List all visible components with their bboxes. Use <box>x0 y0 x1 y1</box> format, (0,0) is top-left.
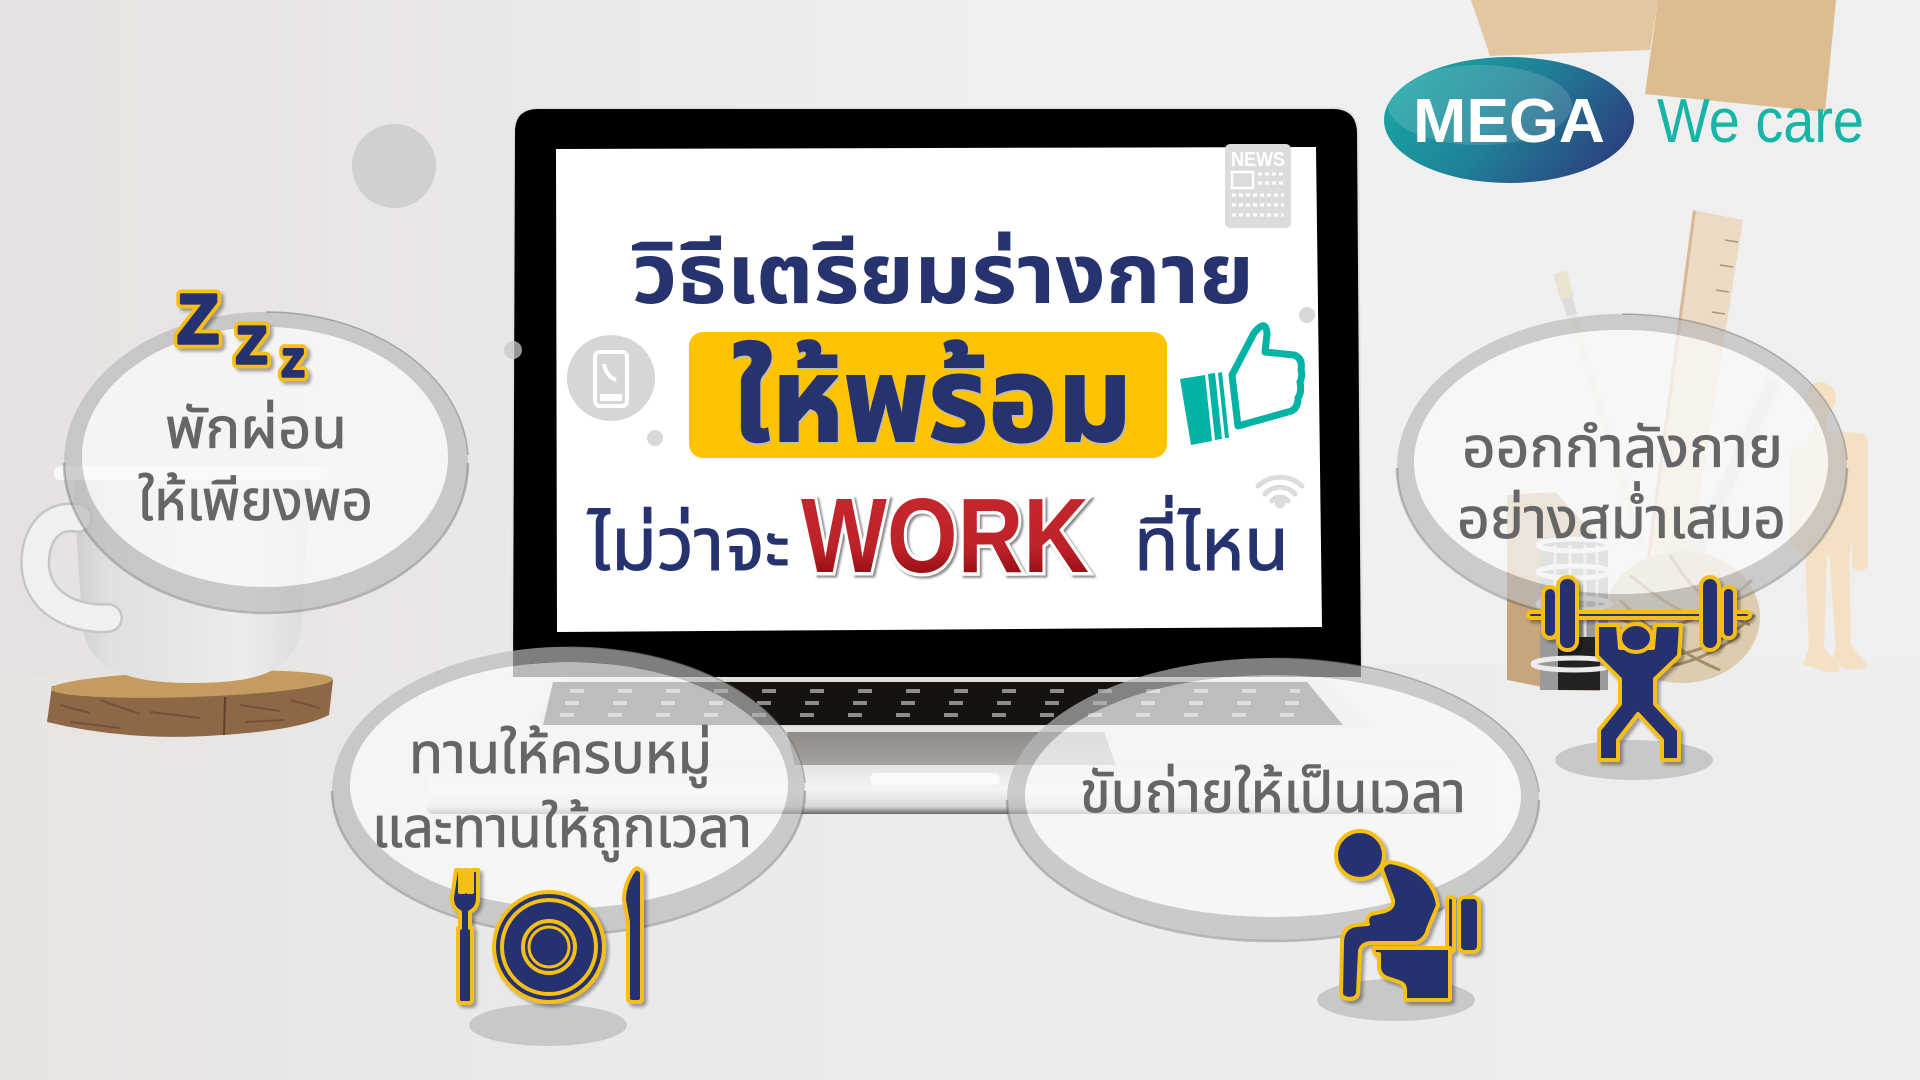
bubble: excretion <box>1007 658 1539 941</box>
laptop lid <box>512 108 1362 678</box>
coffee mug on wooden coaster <box>35 466 333 737</box>
icon: thumbs up <box>1180 326 1302 445</box>
yellow highlight box <box>689 332 1167 458</box>
kraft paper notes <box>1471 0 1836 112</box>
icon: Zzz: Z <box>282 343 304 385</box>
bubble: eat <box>332 647 805 934</box>
icon: news <box>1225 144 1291 228</box>
small grey dots <box>504 307 1315 446</box>
eat text: และทานให้ถูกเวลา <box>372 796 752 862</box>
laptop screen <box>556 147 1322 632</box>
laptop base <box>427 677 1464 814</box>
exercise text: อย่างสม่ำเสมอ <box>1457 481 1786 550</box>
wooden mannequin <box>1790 382 1868 673</box>
bubble: exercise <box>1397 314 1847 621</box>
eat text <box>372 722 752 862</box>
heading line 2: ให้พร้อม <box>732 335 1132 467</box>
heading line 3: Thai suffix: ที่ไหน <box>1134 495 1289 586</box>
rest text: ให้เพียงพอ <box>138 469 373 532</box>
logo: MEGA We care: MEGA <box>1413 87 1605 156</box>
logo: MEGA We care <box>1384 57 1864 183</box>
laptop <box>427 108 1464 814</box>
icon: Zzz: Z <box>177 280 219 358</box>
icon: weightlifter <box>1528 577 1750 780</box>
eat text: ทานให้ครบหมู่ <box>409 722 712 788</box>
heading line 3: Thai prefix: ไม่ว่าจะ <box>587 503 790 586</box>
icon: Zzz: Z <box>282 343 304 385</box>
logo: MEGA We care: We care <box>1657 87 1864 156</box>
icon: Zzz: Z <box>177 280 219 358</box>
icon: news: NEWS <box>1231 149 1285 171</box>
rest text: พักผ่อน <box>165 397 347 460</box>
grey decorative circle <box>352 124 436 208</box>
desk objects: brush, ruler, pen, twine, holder, cup <box>1507 210 1775 691</box>
bubble: rest <box>64 312 468 613</box>
icon: person on toilet <box>1317 831 1479 1021</box>
icon: Zzz: Z <box>236 317 267 375</box>
icon: wifi <box>1258 477 1302 506</box>
heading line 1: วิธีเตรียมร่างกาย <box>631 227 1254 321</box>
heading WORK: WORK <box>801 477 1089 595</box>
exercise text <box>1457 416 1786 550</box>
rest text <box>138 397 373 532</box>
icon: plate fork knife <box>452 868 642 1046</box>
icon: Zzz: Z <box>236 317 267 375</box>
icon: Zzz <box>177 280 304 385</box>
excretion text: ขับถ่ายให้เป็นเวลา <box>1080 761 1466 824</box>
icon: phone in circle <box>567 335 655 421</box>
exercise text: ออกกำลังกาย <box>1462 416 1783 479</box>
